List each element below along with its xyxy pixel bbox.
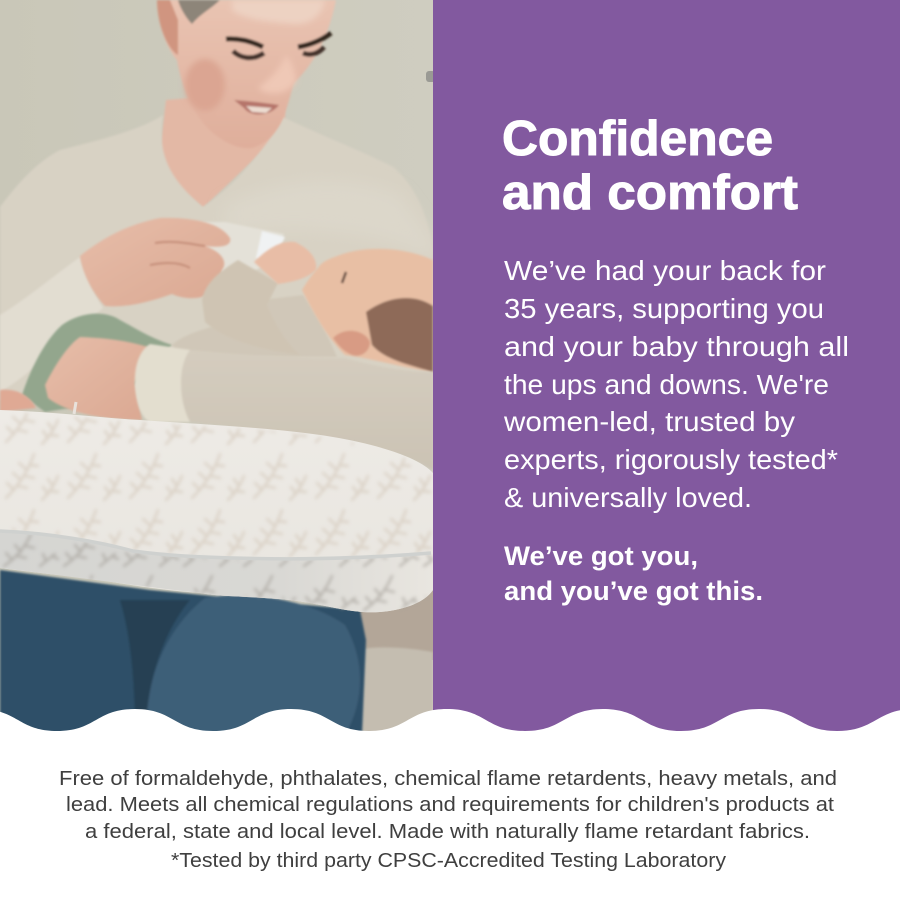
blue trousers: [0, 570, 366, 735]
body text: and your baby through all: [504, 331, 849, 362]
forehead highlight: [232, 0, 325, 24]
heading: and comfort: [502, 166, 798, 220]
father neck and chest: [160, 90, 285, 208]
baby foot: [0, 390, 36, 412]
footer disclaimer: *Tested by third party CPSC-Accredited Testing Laboratory: [171, 850, 726, 872]
baby body in ribbed suit: [172, 295, 337, 357]
father head: [157, 0, 336, 148]
body text: experts, rigorously tested*: [504, 444, 838, 475]
cheek: [185, 59, 225, 111]
pillow leaf print: [0, 412, 433, 557]
bold tagline: and you’ve got this.: [504, 576, 763, 606]
father left sleeve: [0, 257, 103, 392]
nose: [260, 60, 297, 94]
pillow lower panel: [0, 532, 433, 612]
wedding ring: [74, 402, 76, 414]
body text: [503, 255, 849, 513]
green baby pants: [22, 314, 172, 412]
right knee: [146, 595, 360, 735]
father lower hand: [45, 337, 148, 420]
sweater torso: [0, 115, 433, 400]
bottle: [207, 222, 286, 270]
nursing pillow: [0, 410, 433, 612]
mouth: [234, 100, 279, 114]
photo: father bottle feeding baby on nursing pillow: [0, 0, 435, 735]
wall background: [0, 0, 433, 735]
father forearm sleeve: [135, 344, 433, 470]
body text: the ups and downs. We're: [504, 369, 829, 400]
pillow piping seam: [0, 531, 431, 559]
footer disclaimer: Free of formaldehyde, phthalates, chemical flame retardents, heavy metals, and: [59, 768, 837, 790]
wavy white footer band: [0, 709, 900, 900]
baby head: [302, 249, 433, 372]
baby fist: [254, 242, 316, 284]
purple panel: [433, 0, 900, 735]
footer disclaimer: lead. Meets all chemical regulations and requirements for children's products at: [66, 794, 834, 816]
father hand on bottle: [80, 218, 230, 306]
sofa seat: [360, 590, 433, 731]
face: [157, 0, 336, 148]
sweater cuff: [135, 344, 190, 422]
footer disclaimer: a federal, state and local level. Made with naturally flame retardant fabrics.: [85, 821, 810, 843]
bold tagline: We’ve got you,: [504, 541, 698, 571]
pillow body: [0, 410, 433, 612]
body text: We’ve had your back for: [504, 255, 826, 286]
lower panel leaf print: [0, 532, 433, 612]
finger shadows: [150, 242, 205, 268]
wall fixture: [426, 71, 433, 82]
hair: [178, 0, 220, 24]
heading: Confidence: [502, 112, 773, 166]
baby eye: [342, 272, 346, 283]
body text: 35 years, supporting you: [504, 293, 824, 324]
thigh shadow: [120, 600, 189, 710]
eyebrows: [226, 39, 263, 47]
bold tagline: [504, 541, 763, 606]
heading: [502, 112, 798, 220]
body text: & universally loved.: [504, 482, 752, 513]
bottle collar: [256, 231, 286, 258]
eyes: [233, 51, 264, 58]
sweater shading: [225, 181, 433, 260]
baby sleeve with cuff: [202, 260, 277, 326]
baby ear: [333, 331, 370, 356]
body text: women-led, trusted by: [503, 406, 795, 437]
footer disclaimer: [59, 768, 837, 872]
baby hair: [366, 298, 433, 372]
ear: [157, 0, 178, 55]
